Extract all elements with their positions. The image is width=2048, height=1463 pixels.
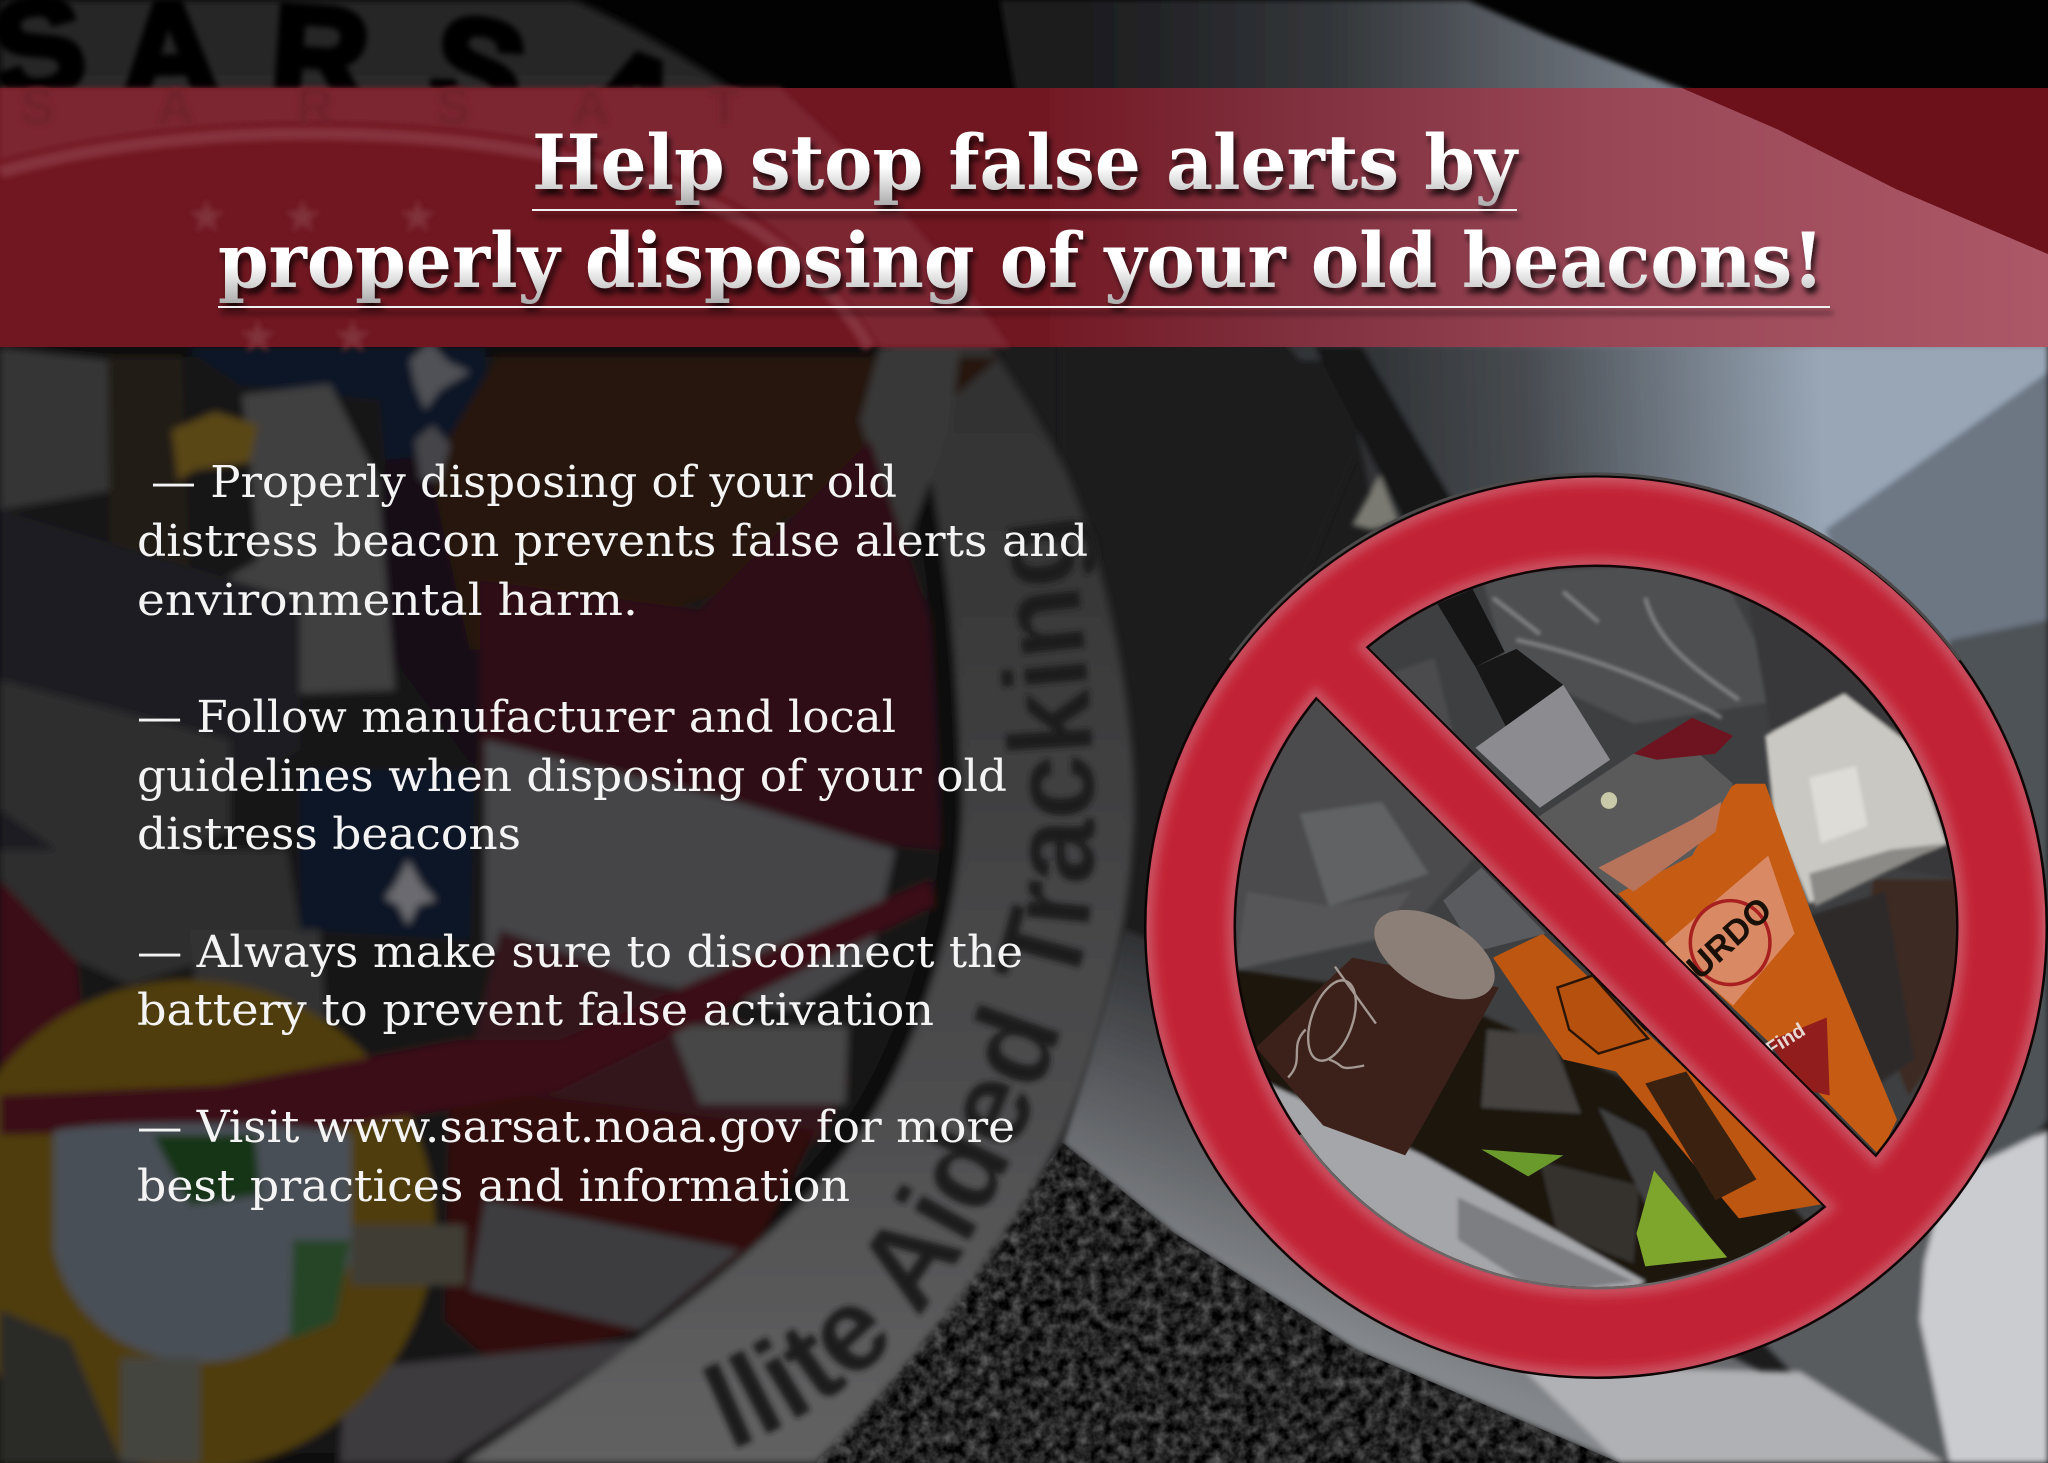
black sky at top — [0, 0, 2048, 90]
sign: red face — [1190, 521, 2002, 1333]
banner: faint stars: ★ — [397, 189, 438, 243]
seal lettering: SARSAT: A — [560, 14, 704, 191]
red clip — [1634, 718, 1733, 760]
seal inner field — [0, 347, 952, 1463]
reflector band — [1475, 685, 1610, 808]
dark debris — [1235, 970, 1821, 1299]
banner: seal lettering ghost: SARSAT — [20, 78, 740, 136]
bag shaded fold — [1825, 372, 2048, 1040]
label panel — [1663, 856, 1795, 1006]
panel: red title banner — [0, 78, 2048, 363]
seal outer ring — [0, 0, 1134, 1463]
green scrap — [1481, 1149, 1563, 1176]
bag dark lower right — [1780, 620, 2048, 1360]
sign: top gray rim — [1230, 474, 1960, 660]
orange body — [1593, 784, 1897, 1155]
cup lid — [1360, 891, 1509, 1018]
clear dome — [1534, 748, 1733, 898]
text block: bullet list — [137, 457, 1088, 1212]
bullet: guidelines: guidelines when disposing of your old — [137, 751, 1007, 802]
bag right of strap — [1340, 346, 2048, 1180]
title line 2: properly disposing of your old beacons! — [218, 216, 1824, 305]
title — [218, 118, 1830, 308]
paper scrap — [1352, 475, 1397, 530]
banner: right dark corner — [1682, 88, 2048, 254]
icon: prohibition sign — [1190, 474, 2002, 1333]
maker logo ring — [1690, 901, 1770, 985]
title line 1: Help stop false alerts by — [532, 118, 1519, 207]
plastic highlights — [1236, 660, 1474, 950]
sign: dark outline — [1190, 521, 2002, 1333]
lower orange body — [1493, 934, 1827, 1218]
bullet: guidelines: distress beacons — [137, 809, 521, 860]
printed text blocks — [1645, 1071, 1756, 1200]
bullet: guidelines: — Follow manufacturer and local — [137, 692, 896, 743]
white bag — [1268, 1083, 1645, 1311]
white bag bottom — [1520, 1366, 1945, 1463]
tissue — [1765, 694, 1947, 904]
lower clear window — [1443, 868, 1546, 952]
photo: trash bag and pavement — [1000, 0, 2048, 1463]
seal lettering: Satellite Aided Tracking: llite Aided Tracking — [700, 518, 1098, 1450]
bullet: guidelines — [137, 692, 1007, 860]
bullet: website: — Visit www.sarsat.noaa.gov for more — [137, 1102, 1015, 1153]
banner: faint stars: ★ — [186, 189, 227, 243]
beacon cap — [1476, 649, 1564, 726]
sign: bottom inner gray rim — [1300, 1135, 1790, 1288]
bullet: disposal: distress beacon prevents false alerts and — [137, 516, 1088, 567]
bag above and behind the banner — [1080, 0, 2048, 360]
bullet: disposal: — Properly disposing of your old — [151, 457, 897, 508]
seal photo — [0, 0, 1134, 1463]
sign: soft bevel edge — [1190, 521, 2002, 1333]
bag lower left — [1063, 930, 1940, 1463]
title underline 1 — [532, 209, 1517, 211]
dark gap by white bag — [1760, 1190, 1950, 1463]
bullet: battery: battery to prevent false activation — [137, 985, 934, 1036]
bullet: website: best practices and information — [137, 1161, 850, 1212]
coffee cup — [1256, 958, 1499, 1155]
maker logo: McMURDO — [1624, 890, 1779, 1039]
orange inner band — [1598, 802, 1721, 892]
cup icon — [1288, 967, 1376, 1077]
banner: faint stars — [186, 189, 438, 363]
pavement gravel — [816, 1143, 1620, 1463]
LED — [1601, 792, 1617, 809]
banner: faint stars: ★ — [282, 189, 323, 243]
banner: faint stars: ★ — [237, 309, 278, 363]
photo: discarded beacon in trash inside sign — [1236, 567, 1956, 1287]
dark bin left of sign — [1000, 0, 1400, 950]
badge text: Find — [1762, 1019, 1809, 1061]
title underline 2 — [218, 306, 1830, 308]
banner: translucent trash bag tint — [1050, 88, 2048, 347]
green wrapper — [1636, 1170, 1727, 1266]
red badge — [1768, 1018, 1830, 1095]
banner: translucent seal ring — [0, 88, 1010, 347]
bullet: website — [137, 1102, 1015, 1212]
seal lettering: SARSAT — [0, 0, 704, 191]
strap — [1437, 589, 1505, 667]
bullet: disposal: environmental harm. — [137, 575, 638, 626]
strap — [1314, 346, 1470, 560]
bullet: disposal — [137, 457, 1088, 626]
bullet: battery — [137, 927, 1023, 1036]
white bag lower right — [1915, 1130, 2048, 1463]
bullet: battery: — Always make sure to disconnect the — [137, 927, 1023, 978]
banner: faint seal stripe — [0, 134, 870, 347]
banner: faint stars: ★ — [332, 309, 373, 363]
warning label — [1557, 976, 1648, 1054]
seal details — [0, 342, 1000, 1463]
